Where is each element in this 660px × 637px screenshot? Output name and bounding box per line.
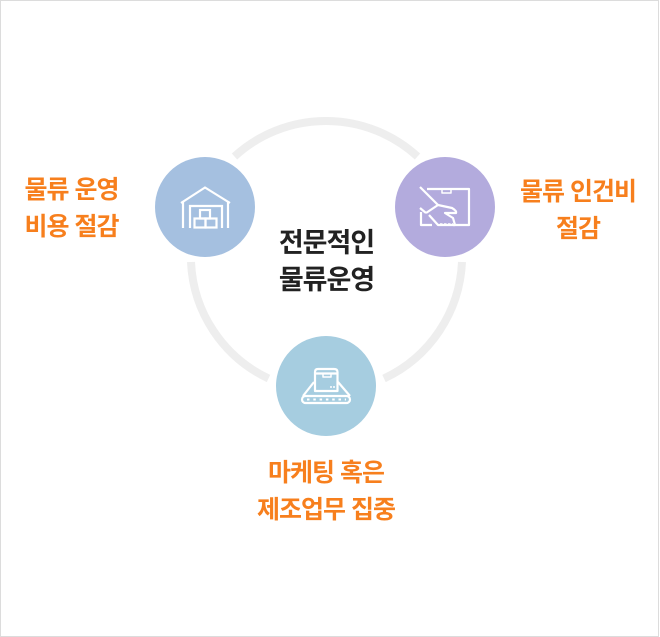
label: focus on marketing or manufacturing [257,459,395,524]
label: logistics labor cost reduction: 물류 인건비 [520,178,636,206]
label: logistics labor cost reduction: 절감 [556,215,600,243]
label: logistics labor cost reduction [520,178,636,243]
ring arc: right [384,262,462,378]
center title: 물류운영 [279,265,374,295]
label: logistics operating cost reduction [25,176,119,241]
label: focus on marketing or manufacturing: 제조업무 집중 [257,496,395,524]
center title [279,228,374,295]
ring arc: top [234,121,418,156]
icon: hand carrying box [395,157,495,257]
ring arc: left [191,262,268,378]
label: logistics operating cost reduction: 비용 절감 [25,213,118,241]
icon: warehouse [155,157,255,257]
label: focus on marketing or manufacturing: 마케팅 혹은 [268,459,384,487]
icon: conveyor belt with box [276,336,376,436]
center title: 전문적인 [279,228,374,258]
label: logistics operating cost reduction: 물류 운영 [25,176,118,204]
